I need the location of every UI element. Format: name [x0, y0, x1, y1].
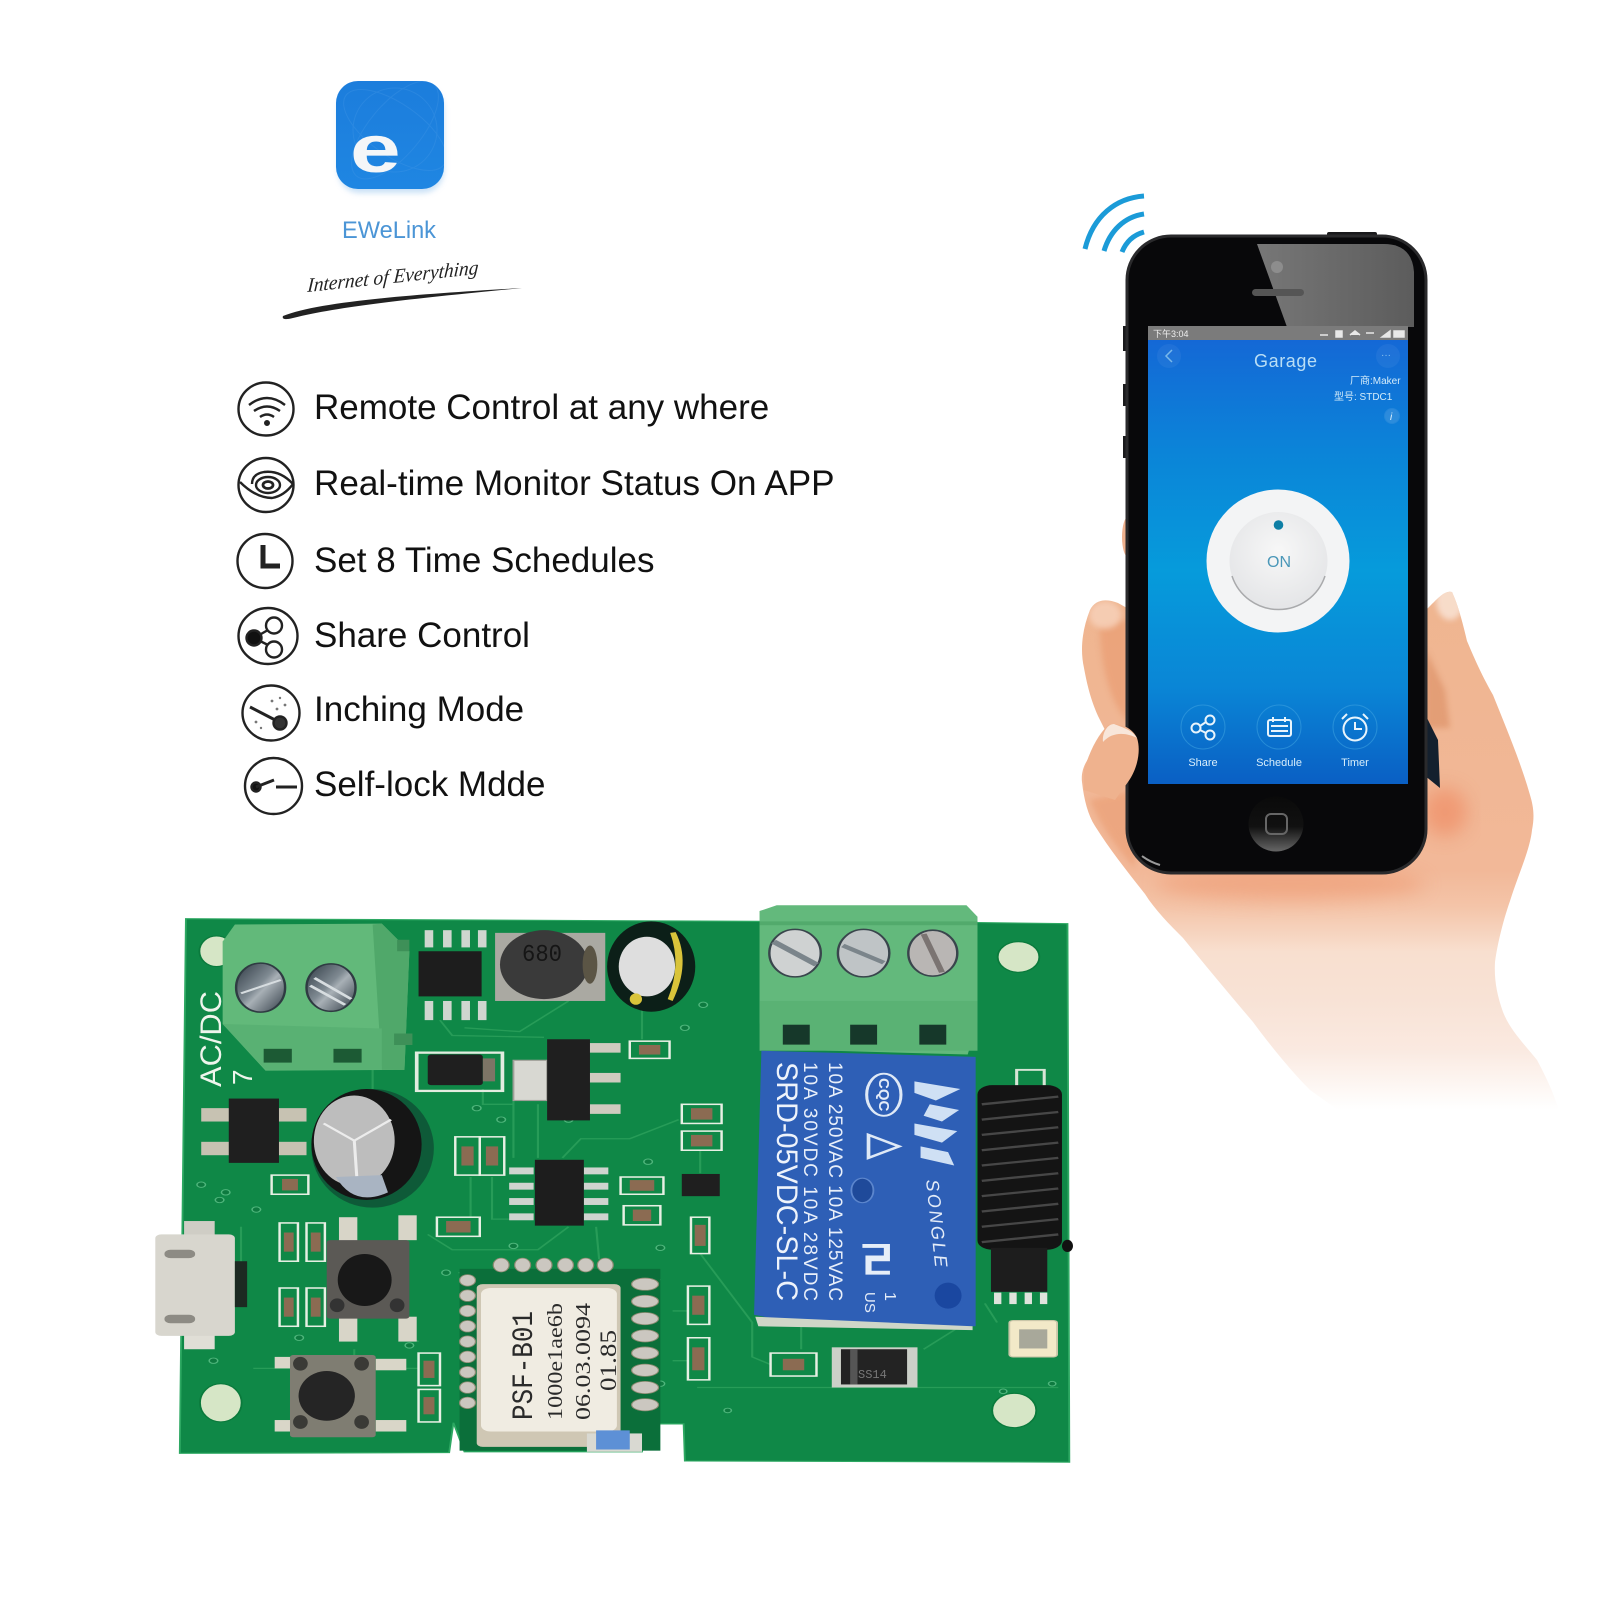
icon: switch	[245, 758, 302, 814]
smartphone	[1123, 232, 1426, 873]
antenna coil	[977, 1070, 1073, 1252]
screen header: Garage	[1254, 351, 1317, 371]
status bar: 下午3:04	[1153, 328, 1189, 339]
module label: model: PSF-B01	[508, 1311, 542, 1420]
wifi signal arcs	[1085, 196, 1144, 252]
camera and speaker	[1252, 261, 1304, 296]
feature: share control	[238, 608, 530, 664]
usb connector	[155, 1221, 247, 1349]
module label: id: 1000e1ae6b	[543, 1303, 567, 1420]
front finger overlapping phone	[1084, 724, 1139, 800]
phone body	[1127, 236, 1426, 873]
relay brand: SONGLE	[922, 1178, 951, 1269]
icon: clock	[238, 534, 292, 588]
push button 1	[327, 1215, 417, 1342]
screen header	[1157, 344, 1401, 424]
silkscreen: 7: 7	[227, 1069, 258, 1085]
relay digit: 1	[881, 1292, 898, 1301]
mounting holes	[199, 936, 1039, 1428]
icon: eye spiral	[238, 458, 294, 512]
share control	[1181, 705, 1225, 769]
soic chip top	[419, 930, 487, 1020]
relay body	[754, 1051, 976, 1330]
app name: EWeLink: EWeLink	[342, 218, 436, 244]
pcb substrate	[180, 919, 1069, 1462]
feature: self-lock mode: Self-lock Mdde	[314, 765, 545, 804]
via dots	[197, 1002, 1056, 1413]
relay line 1: 10A 250VAC 10A 125VAC	[824, 1062, 845, 1301]
feature: schedules: Set 8 Time Schedules	[314, 541, 654, 580]
module label: version: 01.85	[596, 1330, 621, 1391]
songle logo stripes	[914, 1081, 960, 1166]
middle soic chip	[509, 1160, 608, 1226]
app logo: EWeLink icon	[335, 81, 447, 196]
screen header: 型号: STDC1	[1334, 390, 1393, 403]
phone side buttons	[1123, 232, 1377, 458]
top electrolytic capacitor	[607, 921, 695, 1012]
tagline: Internet of Everything	[283, 257, 522, 319]
relay model: SRD-05VDC-SL-C	[770, 1062, 803, 1301]
status bar	[1148, 326, 1408, 340]
regulator SOT-223	[547, 1039, 621, 1120]
small transistor	[682, 1174, 720, 1196]
feature: inching mode	[242, 686, 524, 740]
relay control board	[155, 905, 1073, 1462]
screen header: ···	[1381, 350, 1391, 361]
silkscreen: AC/DC: AC/DC	[195, 991, 228, 1087]
feature: share control: Share Control	[314, 616, 530, 655]
large electrolytic capacitor	[311, 1089, 434, 1208]
screen header: i	[1390, 412, 1393, 423]
diode package middle	[417, 1053, 502, 1091]
hand holding phone	[1082, 580, 1560, 1115]
schedule control	[1256, 705, 1302, 769]
relay line 2: 10A 30VDC 10A 28VDC	[799, 1062, 820, 1301]
icon: inching dial	[242, 686, 300, 740]
phone glass glare	[1257, 244, 1414, 327]
copper traces	[241, 1001, 1058, 1388]
diode SS14	[832, 1347, 917, 1388]
right screw terminal	[760, 905, 977, 1055]
left screw terminal	[223, 924, 412, 1071]
crystal oscillator	[1009, 1321, 1057, 1357]
app screen	[1148, 340, 1408, 784]
feature: real-time monitor	[238, 458, 835, 512]
small smd parts	[272, 1041, 816, 1422]
silkscreen digit 7 under terminal	[232, 1073, 259, 1075]
phone back edge shadow	[1424, 712, 1440, 788]
SOP chip near antenna	[991, 1248, 1047, 1304]
module label: date: 06.03.0094	[571, 1302, 595, 1420]
feature: real-time monitor: Real-time Monitor Status On APP	[314, 464, 835, 503]
schedule control: Schedule	[1256, 757, 1302, 769]
timer control	[1333, 705, 1377, 769]
finger behind phone	[1122, 517, 1134, 557]
app logo: EWeLink icon: e	[350, 112, 401, 186]
icon: wifi	[238, 382, 294, 436]
icon: share nodes	[238, 608, 298, 664]
push button 2	[275, 1355, 406, 1437]
wifi module pcb	[460, 1258, 660, 1452]
feature: self-lock mode	[245, 758, 545, 814]
tagline: Internet of Everything: Internet of Everything	[306, 257, 479, 297]
phone bottom edge highlight	[1142, 856, 1160, 865]
timer control: Timer	[1341, 757, 1369, 769]
feature: remote control: Remote Control at any where	[314, 388, 769, 427]
diode marking: SS14	[858, 1368, 887, 1382]
share control: Share	[1188, 757, 1218, 769]
PCB traced shapes	[155, 905, 1073, 1462]
relay CQC mark: CQC	[875, 1078, 892, 1112]
left transistor package	[201, 1099, 307, 1163]
home button	[1248, 796, 1304, 852]
hand shading	[1089, 580, 1467, 900]
feature: schedules	[238, 534, 654, 588]
feature: inching mode: Inching Mode	[314, 690, 524, 729]
on/off button: ON	[1267, 554, 1291, 571]
inductor 680	[495, 930, 605, 1001]
finger nail	[1103, 724, 1137, 742]
feature list	[238, 382, 835, 814]
feature: remote control	[238, 382, 769, 436]
inductor marking: 680	[522, 942, 562, 969]
silver crystal part	[513, 1060, 547, 1100]
relay US mark: US	[861, 1292, 878, 1313]
screen header: 厂商:Maker	[1350, 374, 1401, 387]
on/off button	[1206, 490, 1350, 632]
